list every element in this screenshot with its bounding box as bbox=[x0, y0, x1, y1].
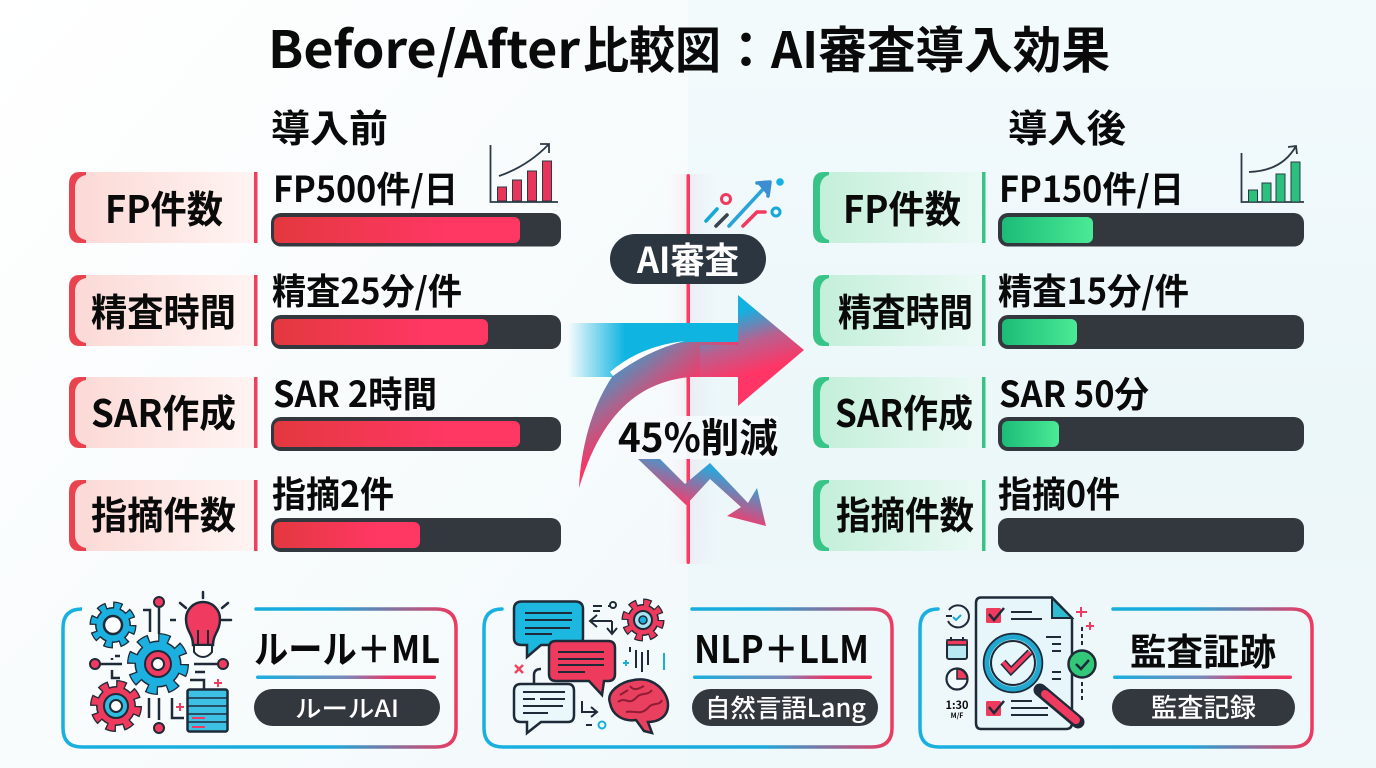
card: rule + ML bbox=[63, 592, 456, 747]
badge: AI review bbox=[610, 232, 766, 284]
card heading: ルール＋ML bbox=[254, 619, 440, 674]
row: SAR after: SAR作成 bbox=[835, 383, 973, 438]
row: review time before: 精査時間 bbox=[91, 282, 236, 337]
card: NLP + LLM bbox=[484, 602, 892, 747]
icon: audit document and magnifier bbox=[946, 598, 1096, 729]
divider bbox=[693, 676, 872, 679]
title: 比較図 bbox=[583, 11, 721, 83]
row: findings before: 指摘2件 bbox=[272, 466, 394, 518]
row: FP count before: FP件数 bbox=[105, 179, 223, 234]
icon: chat bubbles, gear and brain bbox=[514, 602, 668, 733]
icon: before bar chart bbox=[490, 144, 558, 202]
row: review time after bbox=[813, 263, 1304, 349]
row: findings before: 指摘件数 bbox=[91, 485, 236, 540]
row: SAR after bbox=[813, 366, 1304, 451]
row: findings after: 指摘0件 bbox=[998, 466, 1120, 518]
tag: ルールAI bbox=[295, 689, 399, 724]
tag: 自然言語Lang bbox=[705, 689, 867, 725]
card frame bbox=[484, 609, 892, 747]
row: FP count before bbox=[69, 161, 561, 246]
row: FP count after: FP150件/日 bbox=[999, 161, 1184, 213]
stat: 45% reduction: 45%削減 bbox=[618, 406, 778, 464]
text: days: M/F bbox=[951, 711, 963, 721]
title: Before/After bbox=[268, 9, 581, 83]
arrow: main transformation bbox=[568, 295, 804, 488]
card heading: NLP＋LLM bbox=[694, 619, 869, 674]
title: ： bbox=[721, 11, 771, 83]
tag bbox=[254, 689, 440, 726]
row: FP count before: FP500件/日 bbox=[273, 161, 458, 213]
text: time stamp: 1:30 bbox=[945, 697, 969, 713]
row: findings after: 指摘件数 bbox=[836, 485, 974, 540]
card heading: 監査証跡 bbox=[1130, 622, 1276, 676]
row: SAR before: SAR作成 bbox=[91, 383, 236, 438]
title: AI審査導入効果 bbox=[770, 11, 1110, 83]
arrow: down trend bbox=[638, 459, 766, 526]
row: review time before bbox=[69, 263, 561, 349]
divider bbox=[1113, 676, 1292, 679]
card frame bbox=[63, 609, 456, 747]
row: review time before: 精査25分/件 bbox=[272, 263, 462, 315]
title bbox=[268, 9, 1110, 83]
row: FP count after bbox=[813, 161, 1304, 246]
row: findings before bbox=[69, 466, 561, 552]
tag bbox=[1112, 688, 1295, 726]
icon: gears, bulb and table bbox=[90, 592, 231, 733]
panel: after metrics bbox=[813, 161, 1304, 552]
row: SAR before bbox=[69, 366, 561, 451]
panel: before metrics bbox=[69, 161, 561, 552]
heading: after: 導入後 bbox=[1008, 98, 1126, 153]
row: review time after: 精査15分/件 bbox=[998, 263, 1189, 315]
row: FP count after: FP件数 bbox=[843, 179, 961, 234]
heading: before: 導入前 bbox=[271, 98, 388, 153]
icon: growth arrow bbox=[706, 180, 782, 226]
divider bbox=[256, 676, 436, 679]
row: SAR after: SAR 50分 bbox=[999, 366, 1149, 418]
tag: 監査記録 bbox=[1151, 688, 1256, 725]
card frame bbox=[920, 609, 1312, 747]
icon: after bar chart bbox=[1242, 146, 1304, 202]
row: findings after bbox=[813, 466, 1304, 552]
badge: AI review: AI審査 bbox=[636, 232, 739, 284]
row: review time after: 精査時間 bbox=[838, 282, 973, 337]
card: audit trail bbox=[920, 598, 1312, 747]
row: SAR before: SAR 2時間 bbox=[273, 366, 437, 418]
center divider bbox=[660, 174, 716, 564]
